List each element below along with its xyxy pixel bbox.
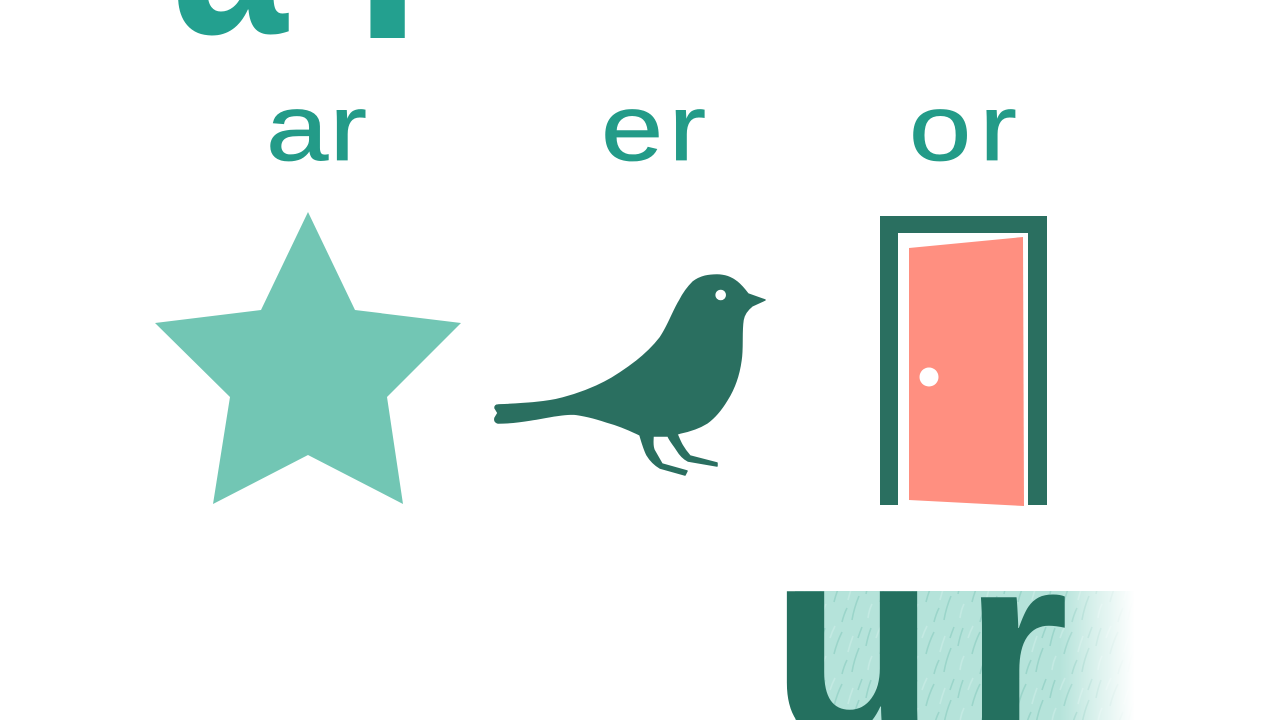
letters: ur xyxy=(770,489,1069,720)
label: or: or xyxy=(909,74,1025,180)
icon: bird xyxy=(495,275,765,475)
icon: open door xyxy=(880,216,1047,506)
label: er: er xyxy=(601,74,712,180)
fur texture xyxy=(795,591,1140,720)
fur word: ur xyxy=(786,591,1128,720)
label: ar: ar xyxy=(266,74,368,180)
door leaf xyxy=(909,237,1024,506)
door knob xyxy=(920,368,938,386)
bird eye xyxy=(715,290,726,300)
large heading letters: ar (cropped at top) xyxy=(172,0,450,91)
icon: star xyxy=(155,212,461,504)
door frame xyxy=(880,216,1047,505)
